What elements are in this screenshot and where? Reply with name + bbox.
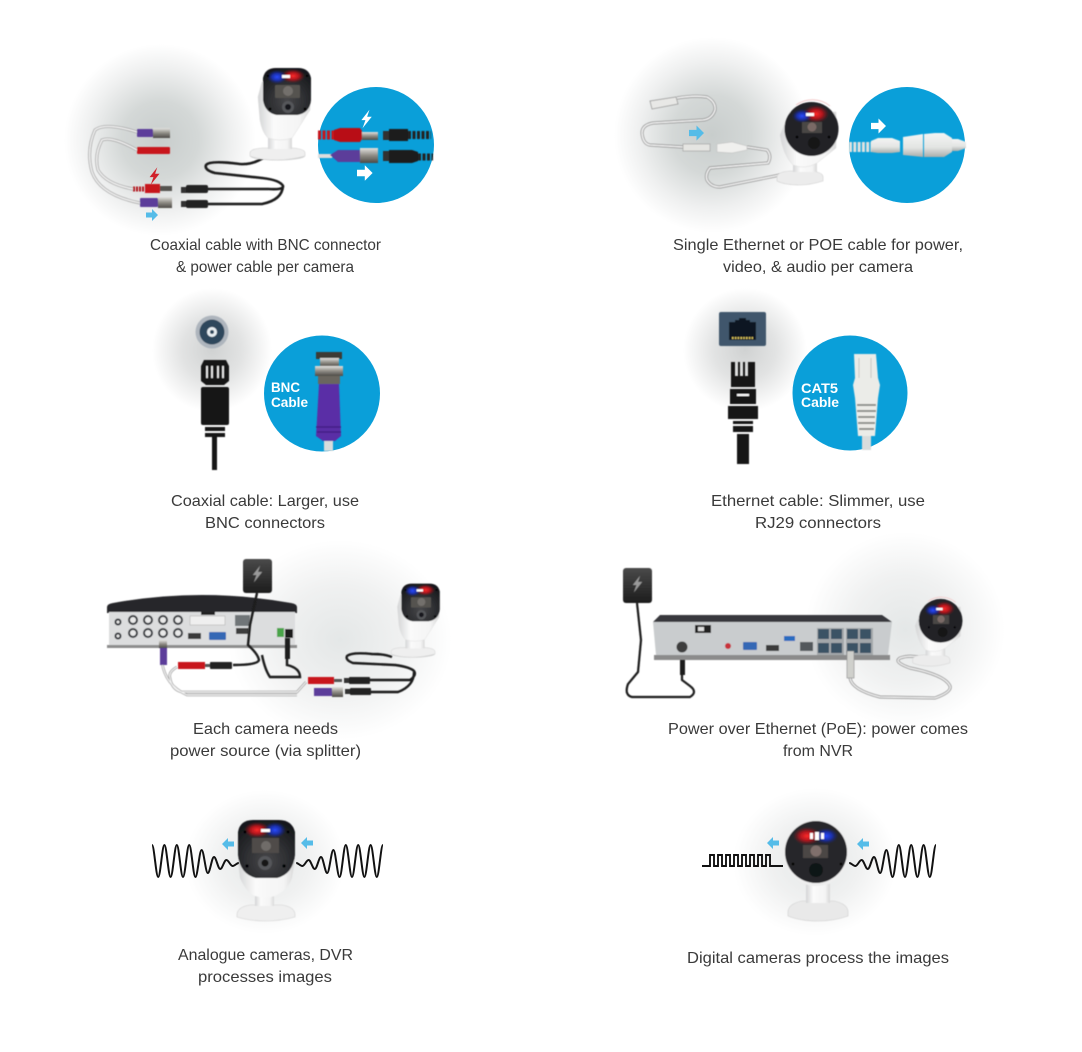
- icon: bullet camera: [250, 68, 311, 160]
- background glow: [683, 288, 807, 412]
- caption: RJ29 connectors: [755, 515, 881, 532]
- icon: red lightning bolt: [150, 167, 160, 185]
- background glow: [733, 788, 897, 936]
- callout: BNC cable close-up: [264, 336, 380, 452]
- icon: round camera: [777, 100, 838, 185]
- background glow: [228, 540, 452, 740]
- chart: analogue wave right: [849, 845, 936, 877]
- caption: Coaxial cable: Larger, use: [171, 493, 359, 510]
- callout: CAT5 cable close-up: CAT5: [801, 380, 838, 396]
- callout: connector close-up: [318, 87, 434, 203]
- icon: black RJ45 plug: [728, 362, 758, 464]
- caption: Single Ethernet or POE cable for power,: [673, 237, 963, 254]
- caption: Digital cameras process the images: [687, 950, 949, 967]
- background glow: [614, 37, 810, 233]
- caption: Ethernet cable: Slimmer, use: [711, 493, 925, 510]
- icon: arrow left: [767, 837, 779, 849]
- callout: CAT5 cable close-up: [792, 336, 908, 450]
- callout: CAT5 cable close-up: Cable: [801, 394, 839, 410]
- background glow: [805, 532, 1005, 728]
- icon: blue arrow: [146, 209, 158, 221]
- icon: BNC socket: [196, 316, 228, 348]
- ethernet cable to camera: [847, 651, 950, 698]
- panel: coaxial BNC connector: [152, 288, 380, 532]
- icon: arrow right side: [301, 837, 313, 849]
- icon: blue arrow: [689, 126, 704, 140]
- caption: Power over Ethernet (PoE): power comes: [668, 721, 968, 738]
- callout: ethernet connector close-up: [849, 87, 966, 203]
- ethernet cable illustration: [642, 96, 780, 187]
- background glow: [152, 288, 272, 412]
- background glow: [64, 44, 256, 236]
- caption: processes images: [198, 969, 332, 986]
- background glow: [185, 790, 345, 934]
- DVR recorder: [107, 595, 297, 648]
- caption: power source (via splitter): [170, 743, 361, 760]
- splitter and cables: [159, 640, 415, 697]
- icon: round camera: [913, 597, 962, 666]
- icon: bullet camera: [391, 584, 440, 658]
- NVR recorder: [653, 615, 892, 660]
- caption: & power cable per camera: [176, 259, 354, 276]
- caption: BNC connectors: [205, 515, 325, 532]
- caption: video, & audio per camera: [723, 259, 913, 276]
- callout: BNC cable close-up: BNC: [271, 379, 300, 395]
- coaxial cable illustration: [90, 126, 283, 208]
- panel: single Ethernet or POE cable: [614, 37, 966, 276]
- icon: arrow right side: [857, 838, 869, 850]
- panel: DVR wiring with splitter: [107, 540, 452, 760]
- panel: analogue camera signal: [152, 790, 383, 986]
- panel: power over Ethernet NVR: [623, 532, 1005, 760]
- callout: BNC cable close-up: Cable: [271, 394, 308, 410]
- power adapter: [233, 559, 300, 677]
- power adapter: [623, 568, 694, 697]
- caption: Coaxial cable with BNC connector: [150, 237, 382, 254]
- caption: Analogue cameras, DVR: [178, 947, 353, 964]
- chart: analogue wave right: [296, 845, 383, 877]
- chart: analogue wave left: [152, 845, 239, 877]
- icon: RJ45 port: [719, 312, 766, 346]
- icon: black coaxial connector: [201, 360, 229, 470]
- panel: coaxial cable with BNC connector: [64, 44, 434, 276]
- panel: ethernet RJ connector: [683, 288, 925, 532]
- panel: digital camera signal: [687, 788, 949, 967]
- icon: front round camera: [783, 820, 849, 921]
- chart: digital square wave: [702, 855, 783, 866]
- caption: from NVR: [783, 743, 853, 760]
- caption: Each camera needs: [193, 721, 338, 738]
- icon: front camera: [237, 820, 295, 921]
- icon: arrow left: [222, 838, 234, 850]
